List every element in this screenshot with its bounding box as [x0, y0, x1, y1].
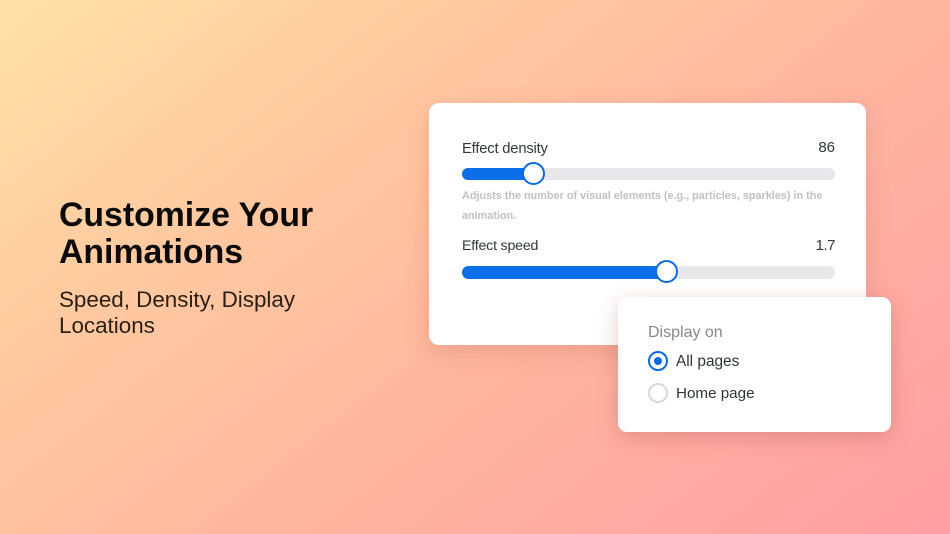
panel: sliders — [429, 103, 866, 345]
radio: all pages — [648, 351, 668, 371]
slider thumb: speed — [655, 260, 678, 283]
slider thumb: density — [522, 162, 545, 185]
option: all pages: All pages — [676, 353, 739, 370]
title: Customize Your — [59, 196, 313, 234]
panel: display on — [618, 297, 891, 432]
slider: density — [462, 168, 835, 180]
subtitle — [59, 287, 295, 338]
slider fill: speed — [462, 266, 667, 279]
subtitle: Locations — [59, 313, 155, 338]
radio: home page — [648, 383, 668, 403]
radio dot — [654, 357, 662, 365]
slider fill: density — [462, 168, 534, 180]
value: speed: 1.7 — [816, 237, 835, 254]
title — [59, 196, 313, 271]
value: density: 86 — [818, 139, 835, 156]
help text: animation. — [462, 210, 516, 222]
label: effect density: Effect density — [462, 141, 548, 157]
option: home page: Home page — [676, 385, 755, 402]
help text: Adjusts the number of visual elements (e.g., particles, sparkles) in the — [462, 190, 822, 202]
title: Animations — [59, 233, 243, 271]
slider: speed — [462, 266, 835, 279]
help text — [462, 190, 822, 222]
subtitle: Speed, Density, Display — [59, 287, 295, 312]
label: display on: Display on — [648, 324, 723, 341]
label: effect speed: Effect speed — [462, 238, 538, 254]
